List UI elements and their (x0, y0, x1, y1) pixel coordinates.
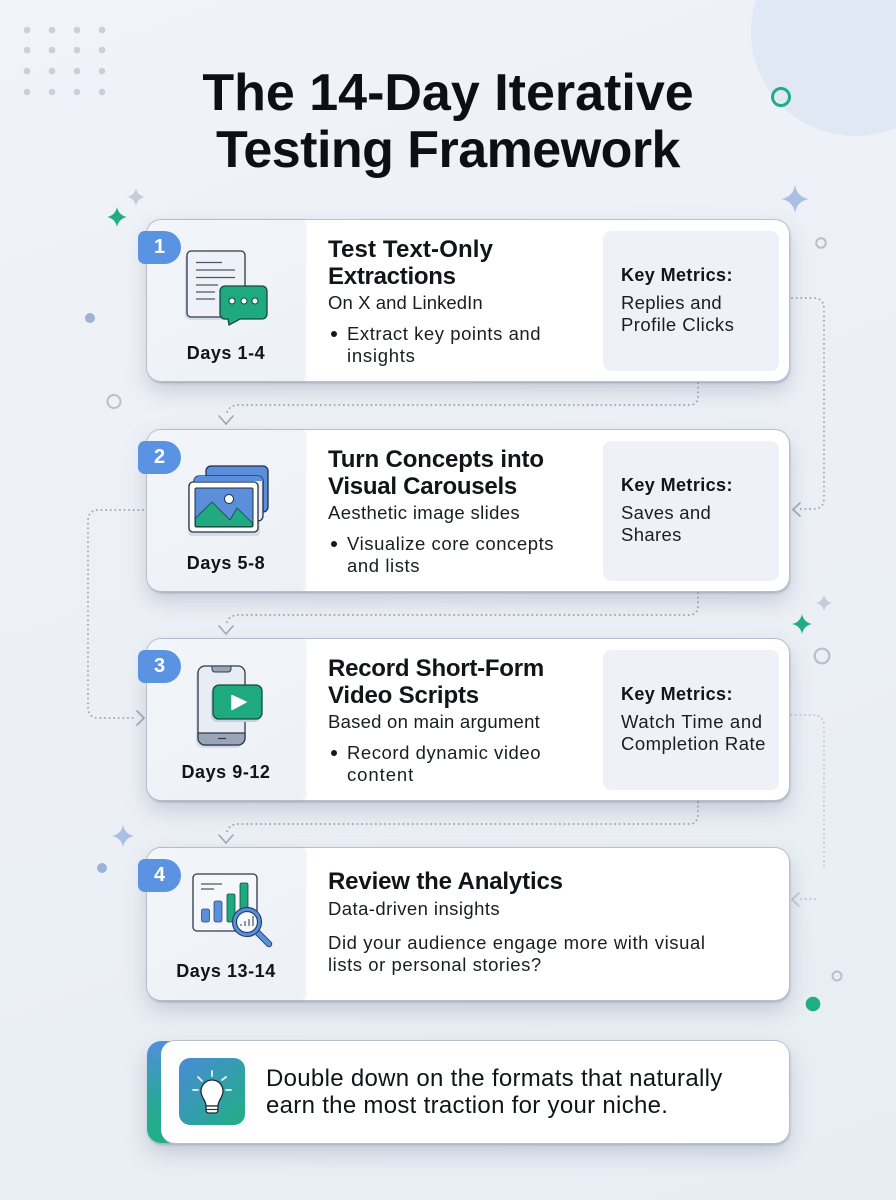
callout white body (161, 1041, 789, 1143)
text block: step 1: insights (347, 345, 416, 366)
callout text (266, 1065, 723, 1119)
icon: phone with video player (196, 665, 263, 748)
text block: step 1: Test Text-Only (328, 236, 493, 263)
text block: step 3: Video Scripts (328, 682, 479, 709)
text block: step 1: Extractions (328, 263, 456, 290)
label: days 9-12: Days 9-12 (181, 762, 270, 782)
arrow: metrics 3 to step 4 faded (791, 715, 824, 906)
text block: step 1 (328, 236, 541, 366)
panel: step 2 timeline side (147, 430, 305, 591)
text block: step 4: Did your audience engage more with visual (328, 932, 706, 953)
icon: document with chat bubble (185, 250, 268, 326)
label: days 1-4: Days 1-4 (187, 343, 265, 363)
text block: step 3: Record Short-Form (328, 655, 544, 682)
callout text: earn the most traction for your niche. (266, 1092, 668, 1119)
panel: key metrics 3 (603, 650, 779, 790)
icon: analytics chart with magnifier (192, 873, 272, 948)
callout: takeaway (147, 1041, 789, 1143)
arrow: step 1 to step 2 (219, 383, 698, 424)
panel: key metrics 1 (603, 231, 779, 371)
label: days 13-14: Days 13-14 (176, 961, 276, 981)
panel: step 1 (147, 220, 789, 381)
panel: step 3 timeline side (147, 639, 305, 800)
arrow: metrics 1 to step 2 (792, 298, 824, 516)
step number 1 (138, 231, 181, 264)
panel: step 1 timeline side (147, 220, 305, 381)
title: Testing Framework (216, 121, 680, 179)
step number 2 (138, 441, 181, 474)
text block: step 2: Aesthetic image slides (328, 502, 520, 523)
panel: step 2 (147, 430, 789, 591)
arrow: step 3 to step 4 (219, 802, 698, 843)
text block: step 2: Visualize core concepts (347, 533, 554, 554)
text block: step 2: and lists (347, 555, 420, 576)
step number 4 (138, 859, 181, 892)
panel: step 4 (147, 848, 789, 1000)
text block: step 4: Review the Analytics (328, 868, 563, 895)
text block: step 2: Turn Concepts into (328, 446, 544, 473)
step number 3 (138, 650, 181, 683)
text block: step 3: Based on main argument (328, 711, 540, 732)
arrow: step 2 to step 3 (219, 593, 698, 634)
text block: step 4: Data-driven insights (328, 898, 500, 919)
panel: key metrics 1: Replies and (621, 292, 722, 313)
panel: step 4 timeline side (147, 848, 305, 1000)
panel: key metrics 1: Key Metrics: (621, 265, 733, 285)
panel: key metrics 1: Profile Clicks (621, 314, 734, 335)
text block: step 1: Extract key points and (347, 323, 541, 344)
panel: key metrics 2 (603, 441, 779, 581)
panel: step 3 (147, 639, 789, 800)
panel: key metrics 3: Key Metrics: (621, 684, 733, 704)
callout text: Double down on the formats that naturally (266, 1065, 723, 1092)
text block: step 2 (328, 446, 554, 576)
step number 4: 4 (154, 864, 165, 886)
arrow: step 2 to step 3 left side (88, 510, 144, 725)
step number 1: 1 (154, 236, 165, 258)
panel: key metrics 3: Completion Rate (621, 733, 766, 754)
step number 3: 3 (154, 655, 165, 677)
panel: key metrics 2: Key Metrics: (621, 475, 733, 495)
text block: step 3: Record dynamic video (347, 742, 541, 763)
text block: step 2: Visual Carousels (328, 473, 517, 500)
panel: key metrics 2: Saves and (621, 502, 711, 523)
text block: step 1: On X and LinkedIn (328, 292, 483, 313)
icon: light bulb (179, 1058, 245, 1125)
step number 2: 2 (154, 446, 165, 468)
title (202, 64, 694, 179)
label: days 5-8: Days 5-8 (187, 553, 265, 573)
text block: step 3 (328, 655, 544, 785)
text block: step 4: lists or personal stories? (328, 954, 542, 975)
text block: step 4 (328, 868, 706, 975)
title: The 14-Day Iterative (202, 64, 694, 122)
icon: stacked image slides (188, 465, 269, 536)
text block: step 3: content (347, 764, 414, 785)
panel: key metrics 3: Watch Time and (621, 711, 763, 732)
panel: key metrics 2: Shares (621, 524, 682, 545)
